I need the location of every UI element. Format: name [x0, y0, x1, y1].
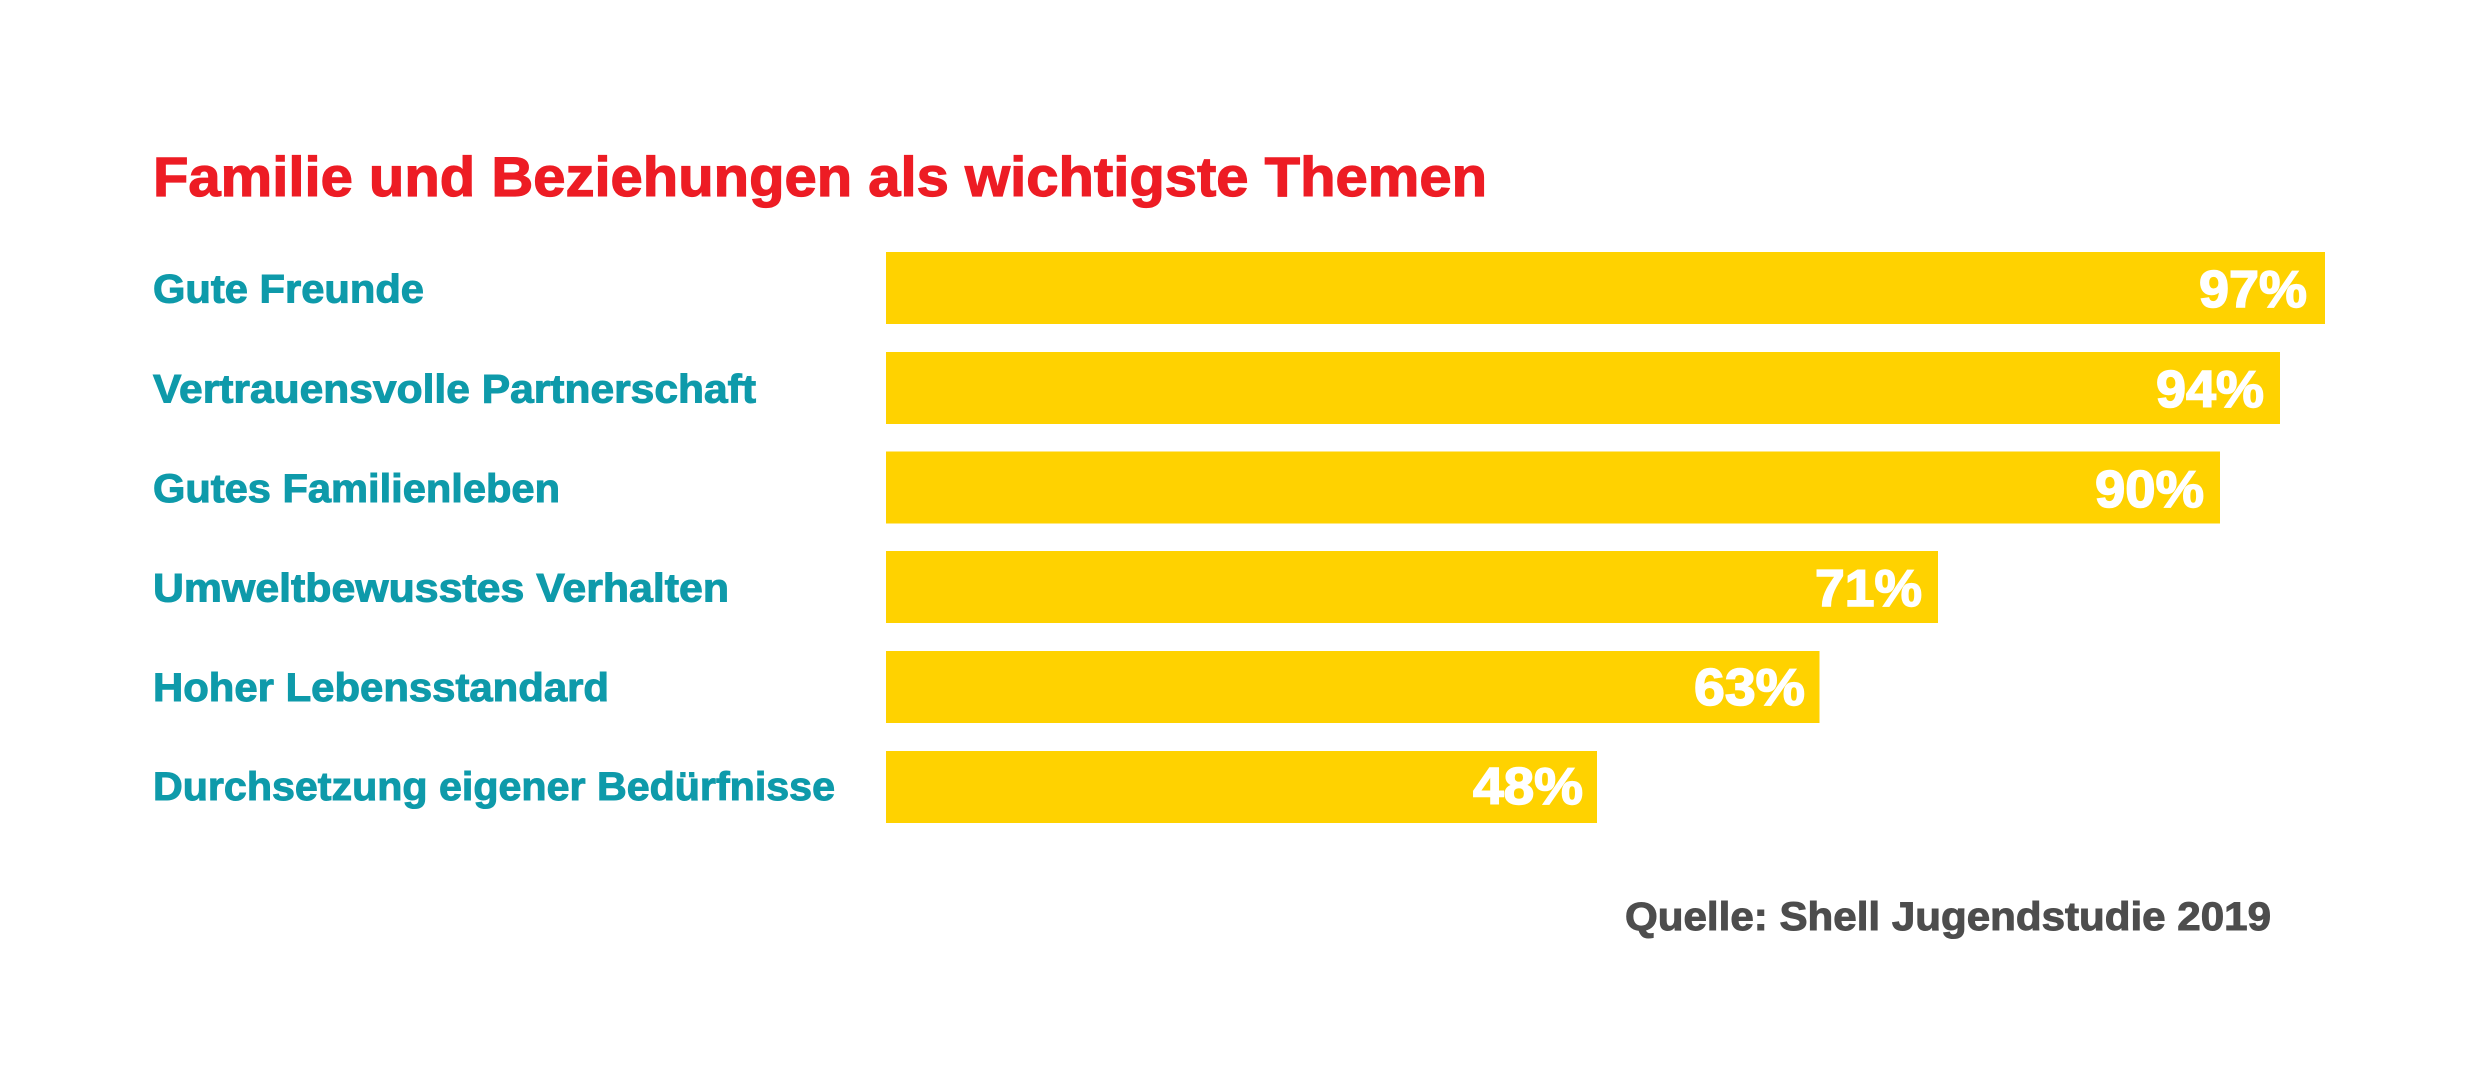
source note: Quelle: Shell Jugendstudie 2019 [1625, 895, 2271, 939]
row: Vertrauensvolle Partnerschaft 94% [153, 352, 2280, 424]
row: Umweltbewusstes Verhalten 71% [153, 551, 1938, 623]
value: 63% [1694, 659, 1805, 717]
value: 71% [1815, 560, 1922, 618]
value: 94% [2156, 361, 2264, 419]
bar [886, 551, 1938, 623]
row: Durchsetzung eigener Bedürfnisse 48% [153, 751, 1597, 823]
row: Gute Freunde 97% [153, 252, 2325, 324]
value: 97% [2199, 261, 2307, 319]
label: Umweltbewusstes Verhalten [153, 566, 729, 610]
row: Hoher Lebensstandard 63% [153, 651, 1820, 723]
label: Vertrauensvolle Partnerschaft [153, 368, 756, 412]
label: Hoher Lebensstandard [153, 666, 609, 710]
value: 90% [2095, 461, 2204, 519]
bar chart [153, 252, 2325, 823]
bar [886, 352, 2280, 424]
row: Gutes Familienleben 90% [153, 452, 2220, 524]
bar [886, 452, 2220, 524]
label: Gutes Familienleben [153, 467, 560, 511]
bar [886, 252, 2325, 324]
label: Gute Freunde [153, 268, 424, 312]
title: Familie und Beziehungen als wichtigste Themen [153, 145, 1487, 208]
bar [886, 751, 1597, 823]
bar [886, 651, 1820, 723]
value: 48% [1473, 758, 1583, 816]
label: Durchsetzung eigener Bedürfnisse [153, 765, 835, 809]
